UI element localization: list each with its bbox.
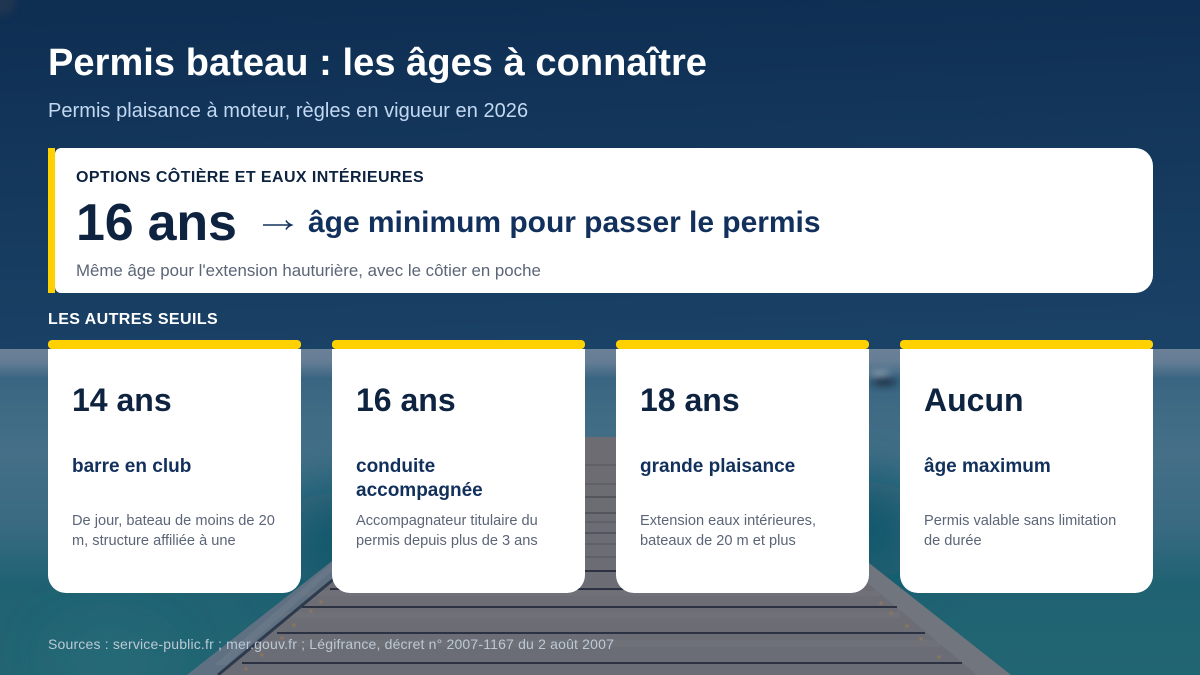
subtitle: Permis plaisance à moteur, règles en vigueur en 2026 <box>48 100 528 122</box>
card: 16 ans: accompagnée <box>356 480 483 501</box>
card: 16 ans: permis depuis plus de 3 ans <box>356 533 538 549</box>
panel: main threshold <box>48 148 1153 293</box>
card: 16 ans: Accompagnateur titulaire du <box>356 513 538 529</box>
card: aucun: Aucun <box>924 382 1024 418</box>
section heading: LES AUTRES SEUILS <box>48 311 218 328</box>
card: 14 ans: De jour, bateau de moins de 20 <box>72 513 275 529</box>
card: aucun: Permis valable sans limitation <box>924 513 1116 529</box>
card: 16 ans <box>332 340 585 593</box>
card: 18 ans <box>616 340 869 593</box>
card: 18 ans: Extension eaux intérieures, <box>640 513 816 529</box>
title: Permis bateau : les âges à connaître <box>48 42 707 84</box>
panel note: Même âge pour l'extension hauturière, avec le côtier en poche <box>76 261 541 280</box>
arrow <box>263 220 294 230</box>
main statement: âge minimum pour passer le permis <box>308 206 821 239</box>
card: 14 ans <box>48 340 301 593</box>
card: 18 ans: grande plaisance <box>640 456 795 477</box>
card: 14 ans: barre en club <box>72 456 191 477</box>
card: aucun <box>900 340 1153 593</box>
card: 18 ans: bateaux de 20 m et plus <box>640 533 796 549</box>
card: 16 ans: 16 ans <box>356 382 456 418</box>
card: 14 ans: m, structure affiliée à une <box>72 533 236 549</box>
card: 16 ans: conduite <box>356 456 435 477</box>
panel background <box>55 148 1153 293</box>
main age: 16 ans <box>76 194 237 252</box>
card: aucun: de durée <box>924 533 982 549</box>
sources: Sources : service-public.fr ; mer.gouv.fr ; Légifrance, décret n° 2007-1167 du 2 août 2007 <box>48 636 614 652</box>
card: 18 ans: 18 ans <box>640 382 740 418</box>
panel accent bar <box>48 148 55 293</box>
card: 14 ans: 14 ans <box>72 382 172 418</box>
panel label: OPTIONS CÔTIÈRE ET EAUX INTÉRIEURES <box>76 169 424 186</box>
card: aucun: âge maximum <box>924 456 1051 477</box>
